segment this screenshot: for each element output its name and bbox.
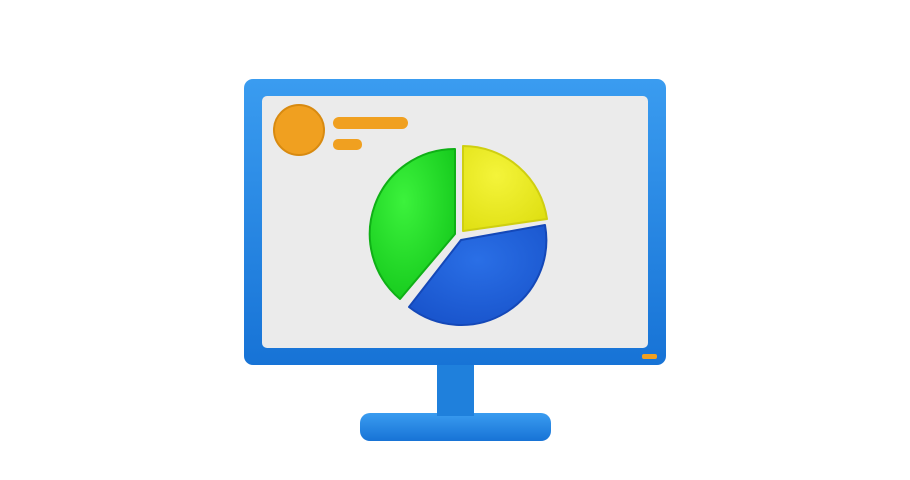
slice: blue [409, 225, 546, 325]
stand neck [437, 360, 474, 416]
text bars [333, 117, 408, 150]
slice: green [370, 149, 455, 299]
monitor frame [244, 79, 666, 365]
screen [262, 96, 648, 348]
pie chart [370, 146, 547, 325]
icon: orange circle [274, 105, 324, 155]
slice: yellow [463, 146, 547, 231]
stand base [360, 413, 551, 441]
power button [642, 354, 657, 359]
